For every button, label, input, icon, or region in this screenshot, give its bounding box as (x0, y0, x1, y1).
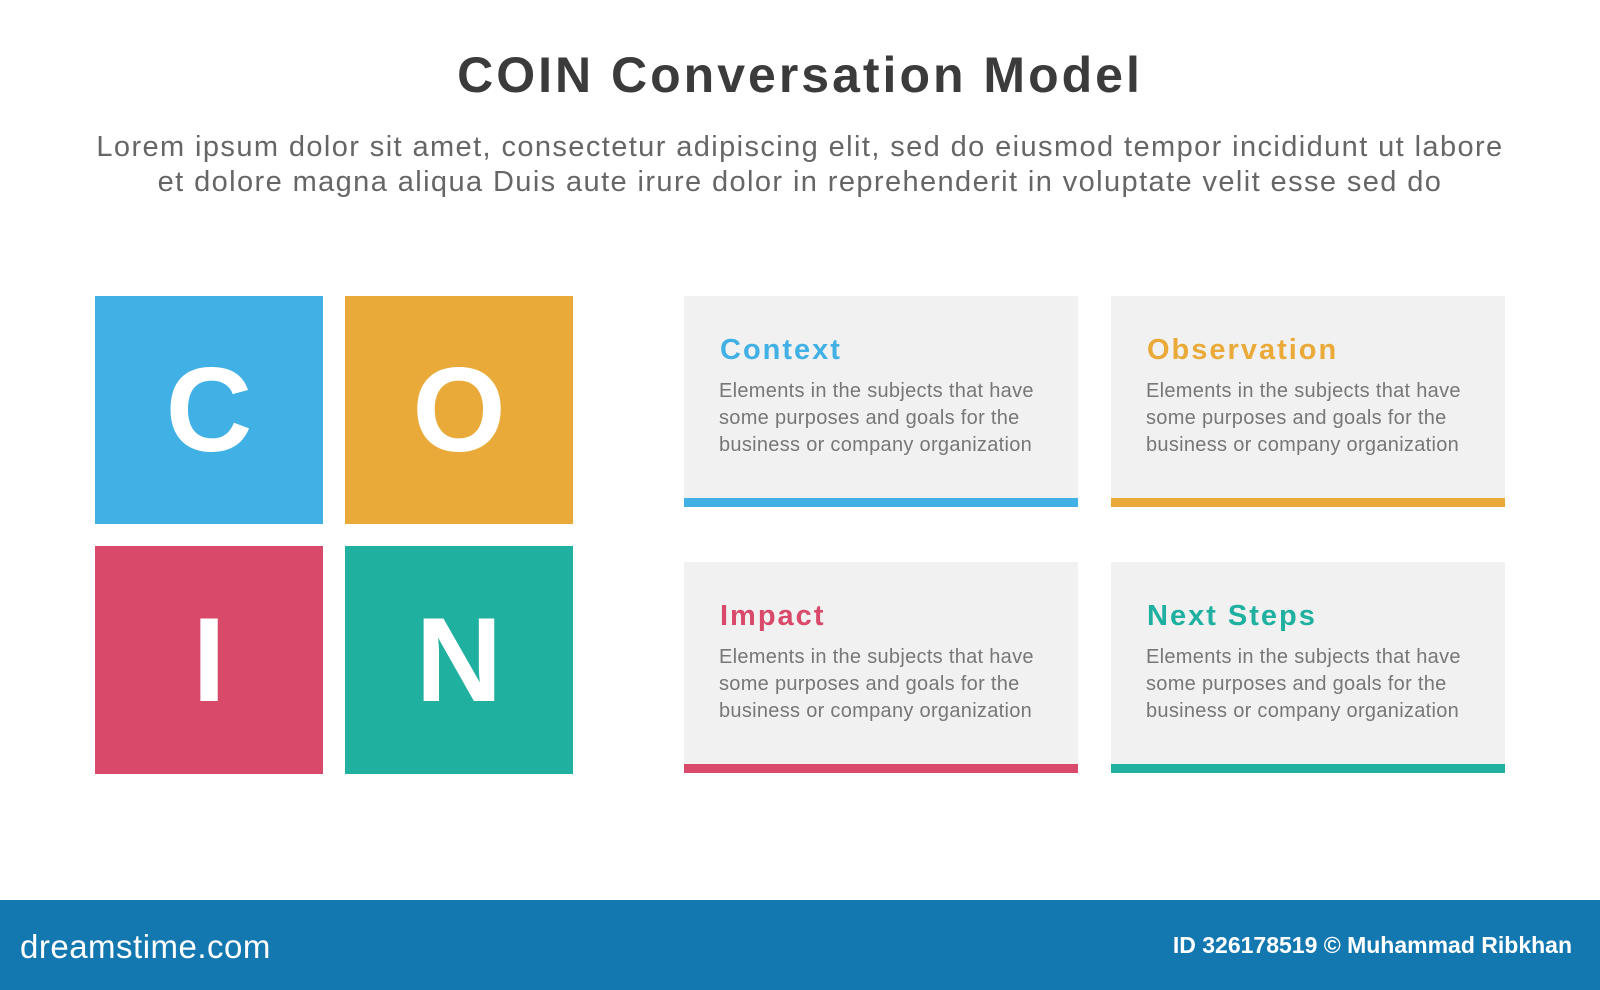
square I (95, 546, 323, 774)
square N (345, 546, 573, 774)
card: impact: Elements in the subjects that have some purposes and goals for the business or company organization (719, 646, 1034, 722)
card: impact (684, 562, 1078, 773)
footer logo: dreamstime.com (20, 928, 271, 965)
footer credit: ID 326178519 © Muhammad Ribkhan (1173, 932, 1572, 958)
card: next steps: Next Steps (1147, 600, 1317, 632)
subtitle: Lorem ipsum dolor sit amet, consectetur adipiscing elit, sed do eiusmod tempor incididunt ut labore (96, 131, 1504, 163)
subtitle: et dolore magna aliqua Duis aute irure dolor in reprehenderit in voluptate velit esse sed do (158, 166, 1442, 198)
square I: I (192, 593, 226, 727)
square O: O (412, 343, 506, 477)
square O (345, 296, 573, 524)
title: COIN Conversation Model (457, 47, 1143, 103)
card: next steps (1111, 562, 1505, 773)
subtitle (96, 131, 1504, 198)
card: observation: Elements in the subjects that have some purposes and goals for the business or company organization (1146, 380, 1461, 456)
card: observation: Observation (1147, 334, 1338, 366)
card: context: Elements in the subjects that have some purposes and goals for the business or company organization (719, 380, 1034, 456)
square C: C (166, 343, 252, 477)
square C (95, 296, 323, 524)
card: context: Context (720, 334, 842, 366)
card: context (684, 296, 1078, 507)
COIN grid (95, 296, 573, 774)
footer (0, 900, 1600, 990)
card: observation (1111, 296, 1505, 507)
card: next steps: Elements in the subjects that have some purposes and goals for the business or company organization (1146, 646, 1461, 722)
square N: N (416, 593, 502, 727)
card: impact: Impact (720, 600, 825, 632)
